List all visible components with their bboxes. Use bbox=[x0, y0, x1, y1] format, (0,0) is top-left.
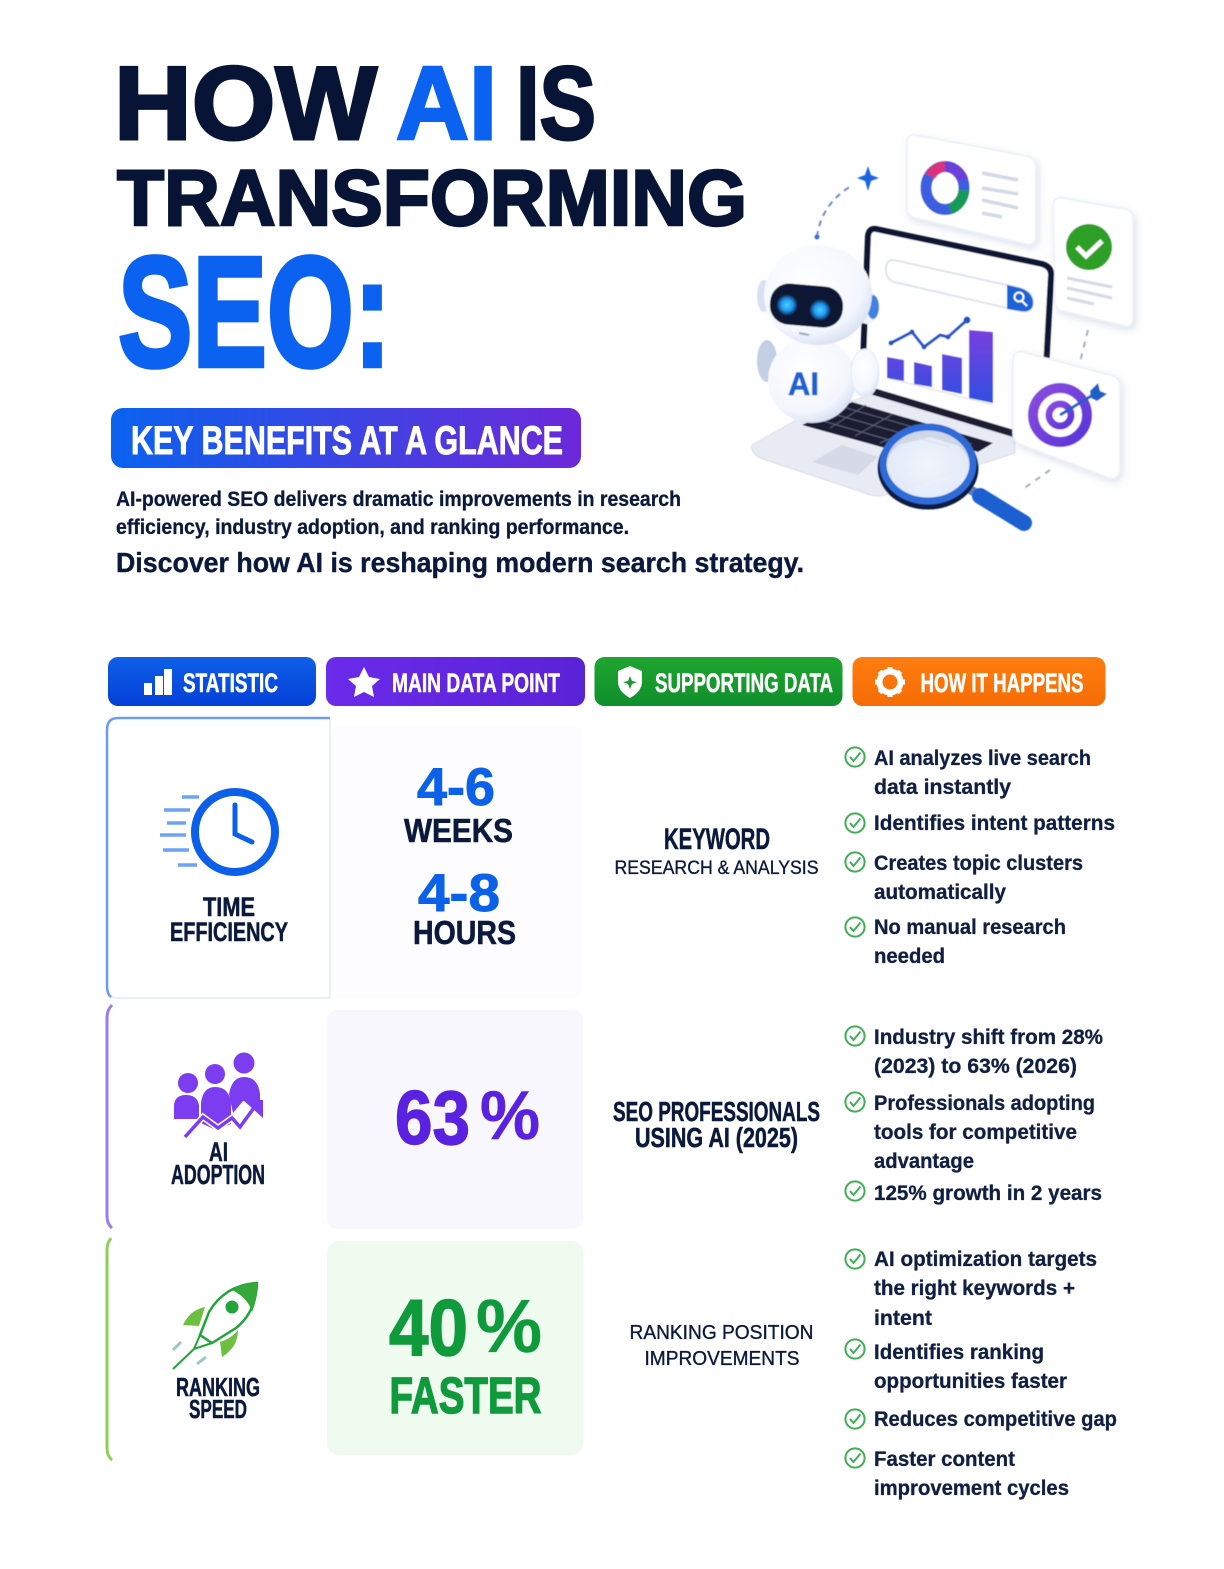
intro text: AI-powered SEO delivers dramatic improvements in research bbox=[116, 488, 681, 511]
how it happens list: Identifies intent patterns bbox=[874, 811, 1115, 835]
how it happens list: improvement cycles bbox=[874, 1476, 1069, 1500]
supporting data: SEO PROFESSIONALS bbox=[613, 1096, 820, 1127]
header: how it happens bbox=[852, 657, 1106, 706]
row 3: ranking speed bbox=[107, 1238, 1117, 1500]
robot bbox=[757, 245, 879, 423]
icon: people with arrow bbox=[174, 1052, 263, 1137]
supporting data: IMPROVEMENTS bbox=[644, 1348, 800, 1370]
how it happens list: AI analyzes live search bbox=[874, 746, 1091, 770]
how it happens list: advantage bbox=[874, 1149, 974, 1173]
how it happens list bbox=[845, 1025, 1103, 1205]
main data cell: HOURS bbox=[413, 914, 516, 951]
how it happens list: intent bbox=[874, 1306, 932, 1330]
how it happens list bbox=[845, 1247, 1117, 1500]
laptop base and keyboard bbox=[752, 395, 1015, 496]
main data cell: FASTER bbox=[390, 1367, 542, 1424]
header: statistic: STATISTIC bbox=[183, 668, 278, 698]
title line: how ai is: IS bbox=[516, 46, 596, 162]
icon: star bbox=[348, 667, 380, 697]
main data cell: % bbox=[480, 1077, 540, 1154]
how it happens list: needed bbox=[874, 944, 945, 968]
illustration: AI robot with laptop bbox=[752, 135, 1133, 523]
supporting data: RANKING POSITION bbox=[630, 1322, 814, 1344]
statistic card: AI bbox=[209, 1137, 228, 1167]
how it happens list: opportunities faster bbox=[874, 1369, 1068, 1393]
row 1: time efficiency bbox=[107, 718, 1115, 998]
statistic card: ADOPTION bbox=[171, 1159, 265, 1190]
title line: transforming: TRANSFORMING bbox=[117, 153, 747, 242]
supporting data: KEYWORD bbox=[664, 823, 770, 856]
main data cell: 40 bbox=[389, 1283, 468, 1372]
statistic card: EFFICIENCY bbox=[170, 917, 288, 947]
header: how it happens: HOW IT HAPPENS bbox=[920, 668, 1084, 698]
title line: how ai is bbox=[114, 46, 596, 162]
statistic card bbox=[107, 1238, 260, 1460]
sparkle and dotted path bbox=[814, 166, 1088, 489]
supporting data: RESEARCH & ANALYSIS bbox=[614, 858, 818, 879]
bar and line chart bbox=[887, 316, 993, 405]
how it happens list: Faster content bbox=[874, 1447, 1015, 1471]
table header row bbox=[108, 657, 1106, 706]
how it happens list: data instantly bbox=[874, 775, 1011, 799]
how it happens list: 125% growth in 2 years bbox=[874, 1181, 1102, 1205]
how it happens list: tools for competitive bbox=[874, 1120, 1077, 1144]
how it happens list: (2023) to 63% (2026) bbox=[874, 1054, 1077, 1078]
main data cell: WEEKS bbox=[404, 812, 513, 849]
how it happens list: Reduces competitive gap bbox=[874, 1407, 1117, 1431]
supporting data bbox=[613, 1096, 820, 1153]
supporting data bbox=[630, 1322, 814, 1370]
intro text: Discover how AI is reshaping modern search strategy. bbox=[116, 547, 804, 578]
row 2: ai adoption bbox=[107, 1005, 1103, 1229]
magnifying glass bbox=[882, 427, 1024, 523]
icon: gear bbox=[875, 667, 905, 697]
main data cell: % bbox=[476, 1284, 542, 1368]
laptop screen bbox=[862, 229, 1051, 442]
main data cell: 4-8 bbox=[418, 864, 500, 923]
main data cell: 4-6 bbox=[417, 758, 495, 817]
supporting data: USING AI (2025) bbox=[635, 1122, 798, 1153]
main data cell bbox=[331, 725, 583, 998]
icon: bars bbox=[144, 669, 172, 695]
intro text: efficiency, industry adoption, and ranking performance. bbox=[116, 516, 629, 539]
intro text bbox=[116, 488, 804, 578]
how it happens list bbox=[845, 746, 1115, 968]
how it happens list: Creates topic clusters bbox=[874, 851, 1083, 875]
title bbox=[114, 46, 747, 400]
subtitle pill: KEY BENEFITS AT A GLANCE bbox=[131, 419, 563, 463]
icon: shield bbox=[618, 666, 642, 698]
search bar bbox=[886, 260, 1033, 311]
statistic card: TIME bbox=[203, 892, 255, 922]
statistic card bbox=[107, 718, 330, 998]
how it happens list: Industry shift from 28% bbox=[874, 1025, 1103, 1049]
statistic card: RANKING bbox=[176, 1372, 260, 1402]
icon: clock bbox=[160, 792, 275, 872]
card: donut chart bbox=[907, 135, 1036, 244]
robot: AI bbox=[788, 366, 819, 402]
main data cell bbox=[327, 1010, 583, 1229]
main data cell bbox=[327, 1241, 583, 1455]
header: statistic bbox=[108, 657, 316, 706]
header: supporting data: SUPPORTING DATA bbox=[655, 668, 833, 698]
how it happens list: Identifies ranking bbox=[874, 1340, 1044, 1364]
how it happens list: Professionals adopting bbox=[874, 1091, 1095, 1115]
how it happens list: No manual research bbox=[874, 915, 1066, 939]
title line: seo: SEO: bbox=[118, 225, 391, 400]
icon: rocket bbox=[173, 1283, 257, 1369]
title line: how ai is: HOW bbox=[114, 46, 378, 162]
supporting data bbox=[614, 823, 818, 879]
card: target bbox=[1013, 352, 1120, 478]
statistic card: SPEED bbox=[189, 1394, 247, 1424]
subtitle pill bbox=[111, 408, 581, 468]
header: supporting data bbox=[594, 657, 842, 706]
title line: how ai is: AI bbox=[396, 46, 497, 162]
header: main data point bbox=[326, 657, 585, 706]
card: green check bbox=[1053, 198, 1133, 326]
header: main data point: MAIN DATA POINT bbox=[392, 668, 560, 698]
how it happens list: automatically bbox=[874, 880, 1006, 904]
how it happens list: the right keywords + bbox=[874, 1276, 1075, 1300]
main data cell: 63 bbox=[395, 1076, 470, 1161]
statistic card bbox=[107, 1005, 265, 1228]
how it happens list: AI optimization targets bbox=[874, 1247, 1097, 1271]
